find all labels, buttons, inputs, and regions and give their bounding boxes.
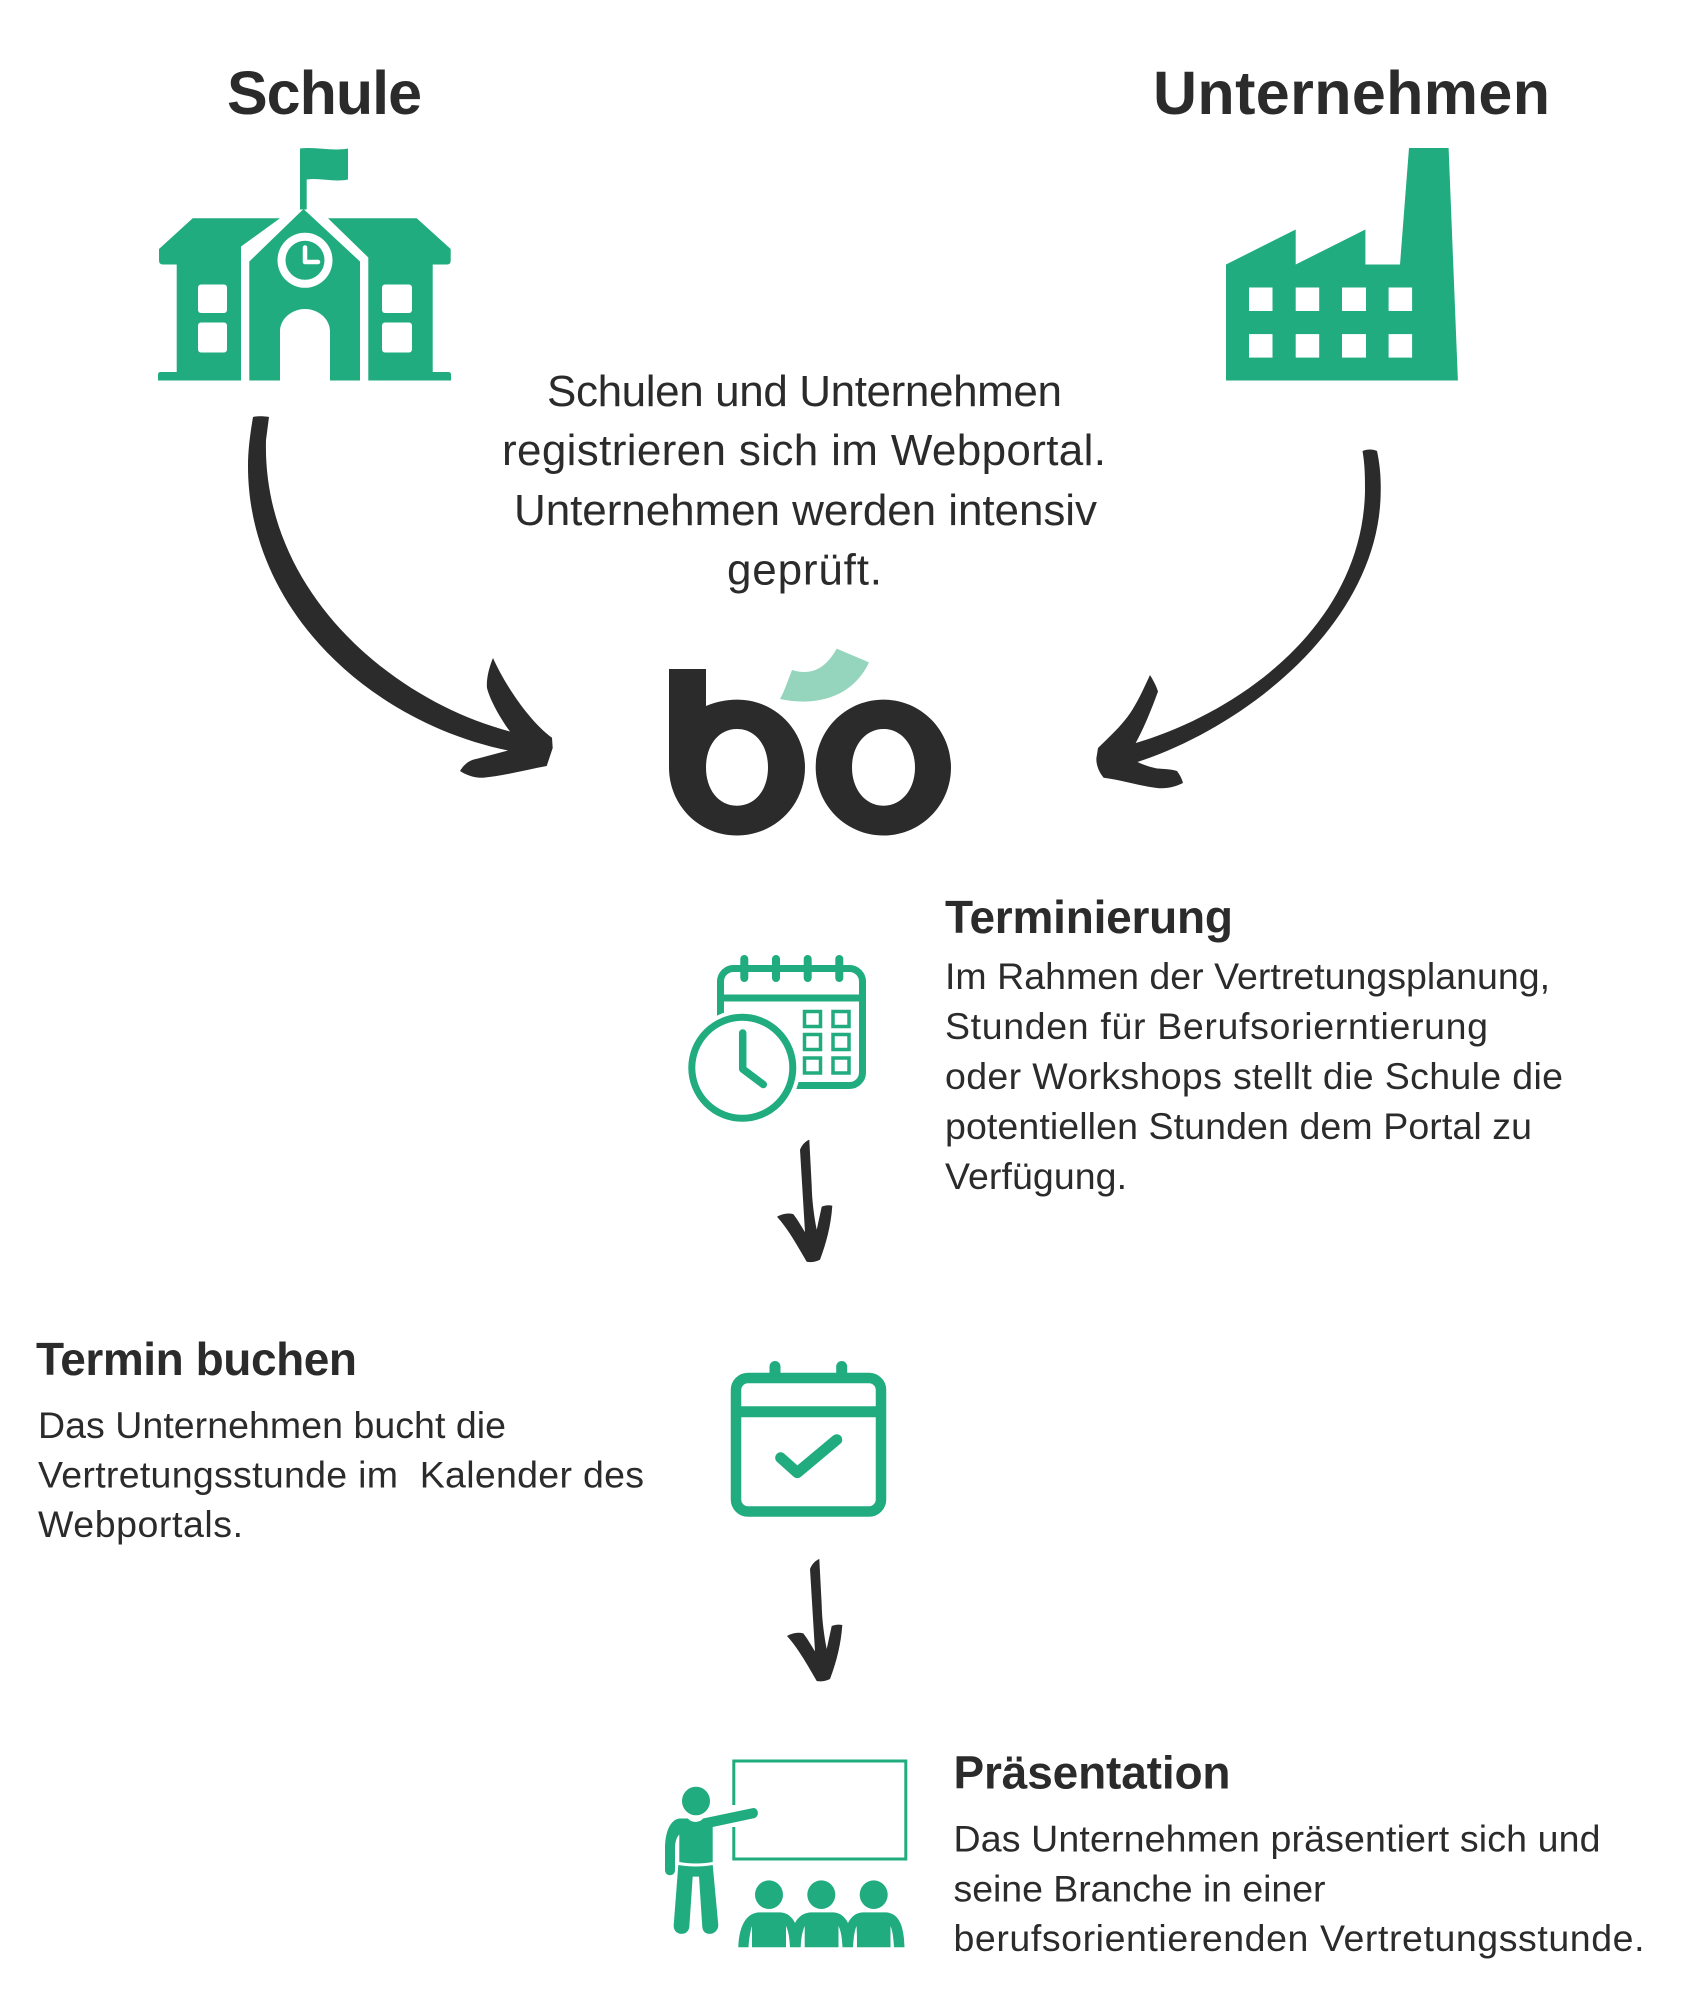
text block: Präsentation: berufsorientierenden Vertretungsstunde. [954, 1917, 1644, 1959]
icon: calendar with clock [684, 959, 866, 1126]
text block: Terminierung: oder Workshops stellt die Schule die [945, 1055, 1563, 1097]
arrow: booking to presentation [787, 1559, 842, 1681]
logo letter b [669, 669, 805, 836]
text block: Präsentation: seine Branche in einer [954, 1867, 1326, 1909]
intro text block: Schulen und Unternehmen [547, 367, 1062, 416]
heading: Terminierung: Terminierung [945, 891, 1233, 943]
presenter [665, 1787, 758, 1934]
intro text block [502, 367, 1106, 594]
heading: Termin buchen: Termin buchen [36, 1333, 357, 1385]
text block: Termin buchen [38, 1404, 644, 1545]
icon: factory [1226, 148, 1458, 380]
logo accent [780, 649, 869, 702]
text block: Termin buchen: Vertretungsstunde im Kalender des [38, 1454, 644, 1496]
intro text block: geprüft. [727, 546, 882, 594]
intro text block: Unternehmen werden intensiv [514, 486, 1097, 535]
heading: Präsentation: Präsentation [954, 1746, 1230, 1798]
icon: calendar with check [736, 1366, 881, 1512]
text block: Präsentation [954, 1817, 1644, 1959]
text block: Terminierung [945, 955, 1563, 1197]
text block: Termin buchen: Das Unternehmen bucht die [38, 1404, 506, 1446]
presentation board [734, 1761, 906, 1859]
text block: Termin buchen: Webportals. [38, 1503, 243, 1545]
icon: school building [158, 148, 451, 380]
arrow: school to logo [248, 416, 553, 778]
text block: Terminierung: potentiellen Stunden dem Portal zu [945, 1105, 1532, 1147]
arrow: calendar to booking [777, 1140, 832, 1262]
text block: Terminierung: Stunden für Berufsorierntierung [945, 1005, 1488, 1047]
text block: Präsentation: Das Unternehmen präsentiert sich und [954, 1817, 1600, 1859]
icon: presenter with audience [665, 1761, 906, 1947]
intro text block: registrieren sich im Webportal. [502, 426, 1106, 475]
heading: Unternehmen: Unternehmen [1153, 59, 1550, 127]
text block: Terminierung: Verfügung. [945, 1155, 1127, 1197]
logo: bo [669, 649, 951, 836]
heading: Schule: Schule [227, 59, 422, 127]
logo letter o [816, 700, 951, 836]
audience [738, 1880, 904, 1947]
text block: Terminierung: Im Rahmen der Vertretungsplanung, [945, 955, 1550, 997]
arrow: company to logo [1096, 450, 1381, 788]
